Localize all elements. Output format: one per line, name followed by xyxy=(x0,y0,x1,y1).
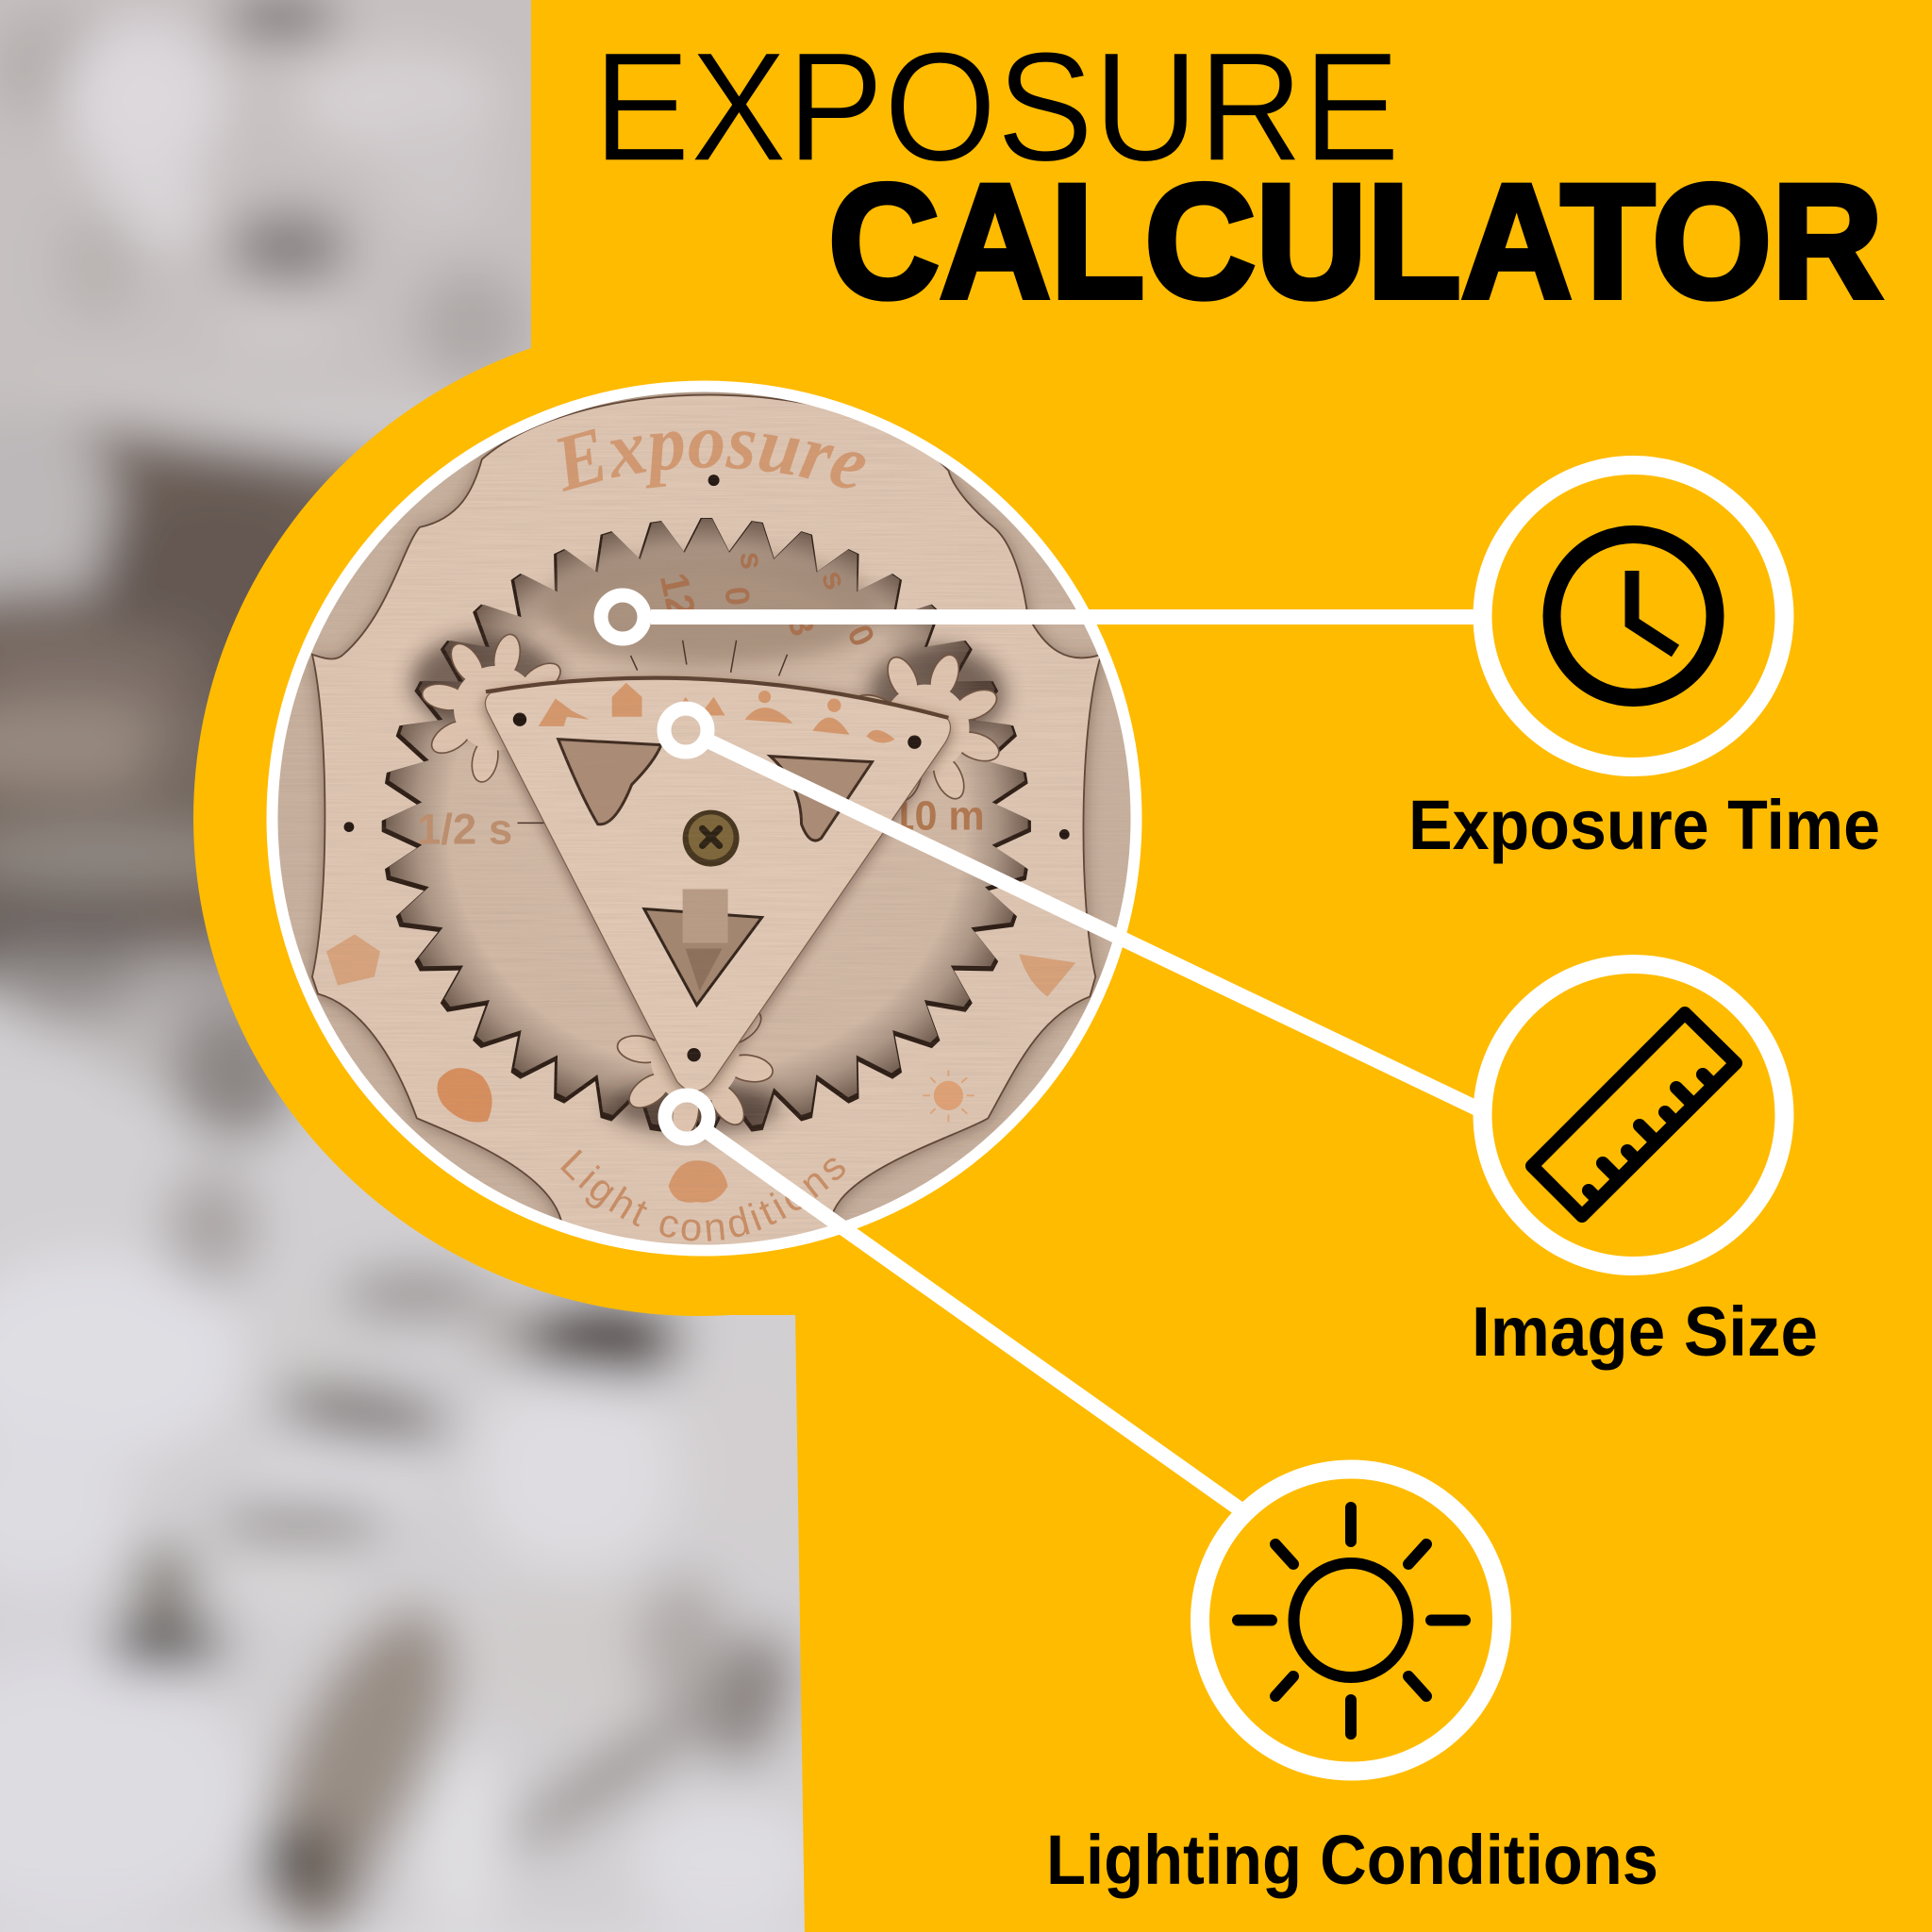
icon: sun xyxy=(1238,1507,1465,1734)
title line: EXPOSURE: EXPOSURE xyxy=(593,20,1400,193)
callout dot: exposure time xyxy=(601,595,644,639)
wooden base plate xyxy=(312,395,1101,1276)
pinion gears xyxy=(407,619,1024,1150)
dial tick marks xyxy=(518,641,788,823)
ring: image size xyxy=(1483,964,1785,1266)
title xyxy=(593,20,1883,332)
dial markings: 3 xyxy=(780,609,823,641)
icon: ruler xyxy=(1532,1013,1736,1216)
ring: exposure time xyxy=(1483,465,1785,767)
gear-shaped opening xyxy=(383,519,1030,1134)
small drilled dots xyxy=(344,475,1070,1061)
blurred photo background xyxy=(0,0,943,1932)
engraved word: Exposure: Exposure xyxy=(557,428,866,491)
dial markings: 12 xyxy=(652,569,705,622)
engraved sun rays xyxy=(923,1070,974,1122)
dial markings: s xyxy=(733,550,769,571)
pointer top edge xyxy=(486,678,948,718)
triangular pointer xyxy=(485,678,950,1091)
dial markings xyxy=(417,550,985,854)
dial markings: 0 xyxy=(840,619,883,652)
white circle border xyxy=(272,387,1136,1251)
dial markings: 1/2 s xyxy=(417,806,512,854)
dial markings: 10 m xyxy=(891,794,985,840)
circular product photo: wooden exposure calculator xyxy=(266,381,1141,1257)
wood grain xyxy=(264,377,1146,1259)
photo background base xyxy=(0,0,943,1932)
central screw xyxy=(683,810,740,867)
engraved icons xyxy=(326,683,1075,1203)
engraved words: Light conditions: Light conditions xyxy=(560,1149,845,1241)
label: Image Size: Image Size xyxy=(1472,1292,1818,1371)
icon: clock xyxy=(1552,534,1715,698)
callout dot: image size xyxy=(664,708,708,752)
arrow window xyxy=(644,890,762,1005)
ring: lighting conditions xyxy=(1200,1470,1502,1772)
callout dot: lighting conditions xyxy=(665,1095,708,1139)
pointer window left xyxy=(558,740,661,824)
dial markings: s xyxy=(814,566,853,594)
callout line: lighting conditions xyxy=(707,1131,1241,1510)
shaded upper dial xyxy=(541,553,880,666)
callout line: exposure time xyxy=(651,609,1481,625)
label: Exposure Time: Exposure Time xyxy=(1408,786,1880,864)
dark shadow around gears xyxy=(411,635,1005,1132)
title line: CALCULATOR: CALCULATOR xyxy=(828,151,1883,332)
pointer window right xyxy=(771,757,872,841)
dial markings: 0 xyxy=(718,585,758,608)
label: Lighting Conditions: Lighting Conditions xyxy=(1046,1821,1658,1899)
callout line: image size xyxy=(708,741,1481,1110)
